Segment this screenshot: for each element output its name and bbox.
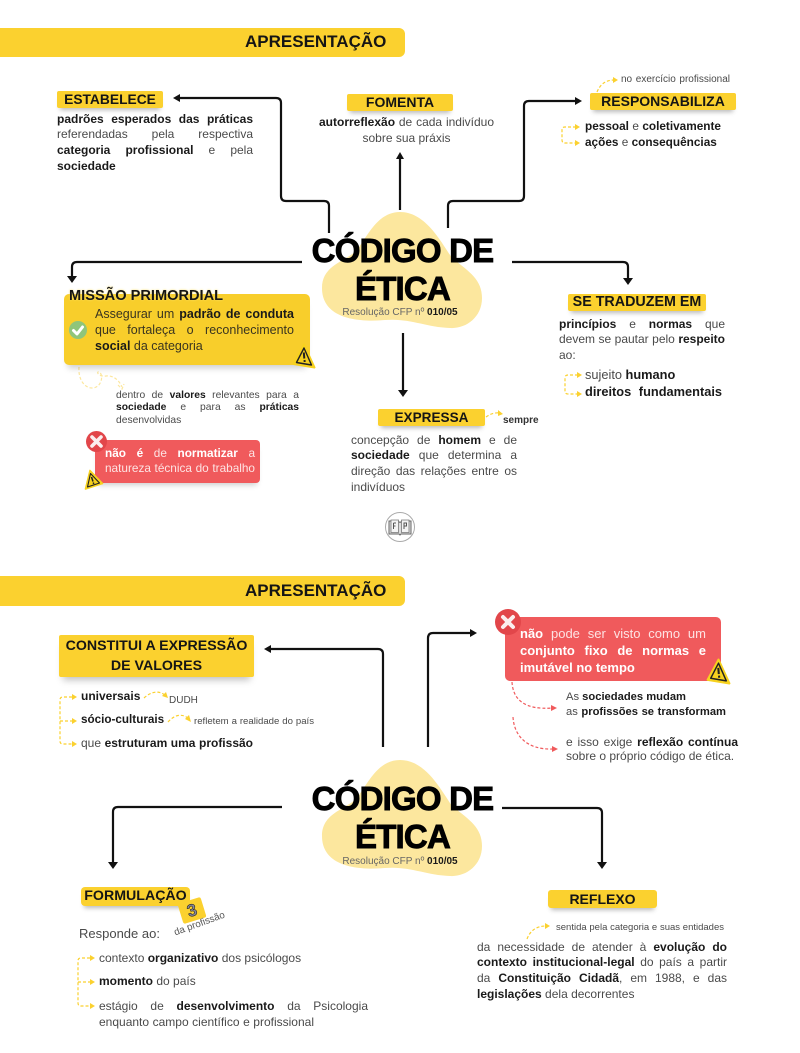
text: não é de normatizar: natureza técnica do trabalho [105, 461, 255, 475]
dashed: responsabiliza list [562, 124, 580, 146]
text: se traduzem em: ao: [559, 348, 576, 362]
text: missão primordial: que fortaleça o reconhecimento [95, 323, 294, 337]
list: formulação: momento do país [99, 974, 196, 988]
icon: warning missão [292, 344, 316, 368]
item: que estruturam uma profissão: que estruturam uma profissão [81, 736, 253, 750]
text: reflexão contínua [566, 734, 738, 763]
list: formulação [99, 950, 368, 1029]
text: estabelece [57, 112, 254, 173]
text: estabelece: referendadas pela respectiva [57, 127, 253, 141]
text: expressa: sociedade que determina a [351, 448, 517, 462]
arrow: to red box [428, 629, 477, 747]
note: sentida pela categoria: sentida pela categoria e suas entidades [556, 922, 724, 932]
text: dentro de valores: sociedade e para as práticas [116, 402, 299, 413]
dashed: formulação list [78, 955, 95, 1009]
list: formulação: enquanto campo científico e profissional [99, 1015, 314, 1029]
text: estabelece: sociedade [57, 159, 116, 173]
logo: book [385, 512, 415, 542]
text: reflexo: contexto institucional-legal do país a partir [477, 955, 727, 969]
text: reflexão contínua: e isso exige reflexão contínua [566, 734, 738, 748]
central blob bottom [322, 760, 482, 876]
arrow: to responsabiliza [448, 97, 582, 228]
banner: apresentação top: APRESENTAÇÃO [245, 32, 386, 51]
banner: apresentação bottom: APRESENTAÇÃO [245, 581, 386, 600]
note: da profissão: da profissão [173, 910, 227, 938]
dashed: universais list [60, 694, 77, 747]
arrow: to expressa [398, 333, 408, 397]
text: fomenta: sobre sua práxis [362, 131, 451, 145]
callout: não pode ser visto [505, 617, 721, 681]
main title bottom: ÉTICA [355, 818, 450, 855]
callout: não é de normatizar [95, 440, 260, 483]
text: missão primordial [95, 307, 294, 353]
banner: apresentação bottom [0, 576, 405, 606]
text: fomenta [319, 115, 494, 145]
list: formulação: contexto organizativo dos psicólogos [99, 950, 301, 964]
subtitle: resolução top: Resolução CFP nº 010/05 [342, 307, 458, 318]
text: não pode ser visto: conjunto fixo de normas e [520, 643, 706, 658]
icon: warning bottom [706, 658, 730, 684]
icon: x bottom [495, 609, 521, 635]
text: reflexo: legislações dela decorrentes [477, 987, 634, 1001]
badge: 3: 3 [185, 900, 199, 921]
text: missão primordial: Assegurar um padrão de conduta [95, 307, 294, 321]
text: dentro de valores [116, 390, 299, 426]
text: expressa: direção das relações entre os [351, 464, 517, 478]
arrow: to constitui [264, 645, 383, 747]
text: dentro de valores: desenvolvidas [116, 415, 181, 426]
panel: missão primordial [64, 294, 310, 365]
icon: x top [86, 431, 107, 452]
text: não pode ser visto [520, 626, 706, 675]
heading: fomenta [347, 94, 453, 111]
badge: 3 [177, 897, 207, 924]
item: universais: universais [81, 688, 140, 702]
main title bottom [312, 780, 494, 855]
text: não pode ser visto: não pode ser visto como um [520, 626, 706, 641]
list: se traduzem em [585, 367, 722, 399]
heading: constitui a expressão de valores: DE VALORES [111, 658, 202, 674]
arrow: to formulação [108, 807, 282, 869]
text: reflexo: da necessidade de atender à evolução do [477, 940, 727, 954]
dashed: no exercício profissional [597, 77, 618, 92]
list: se traduzem em: direitos fundamentais [585, 384, 722, 399]
subtitle: resolução bottom: Resolução CFP nº 010/05 [342, 856, 458, 867]
badge: 3ª da profissão [173, 897, 227, 938]
item: sócio-culturais: sócio-culturais [81, 712, 164, 726]
dashed: sociedades mudam [512, 682, 557, 711]
heading: se traduzem em: SE TRADUZEM EM [573, 294, 701, 310]
text: expressa: indivíduos [351, 480, 405, 494]
dashed: reflexão contínua [513, 717, 558, 752]
text: sociedades mudam: As sociedades mudam [566, 690, 686, 702]
dashed: se traduzem list [565, 372, 582, 397]
note: no exercício profissional: no exercício profissional [621, 74, 730, 85]
central blob top [322, 212, 482, 328]
text: missão primordial: social da categoria [95, 339, 203, 353]
icon: warning callout [84, 470, 104, 490]
main title bottom: CÓDIGO DE [312, 780, 493, 817]
text: não pode ser visto: imutável no tempo [520, 660, 635, 675]
arrow: to reflexo [502, 808, 607, 869]
arrow: to estabelece [173, 94, 329, 233]
text: responsabiliza: ações e consequências [585, 135, 717, 149]
text: reflexo [477, 940, 727, 1001]
heading: reflexo: REFLEXO [569, 891, 636, 907]
main title top [312, 232, 494, 307]
main title top: CÓDIGO DE [312, 232, 493, 269]
text: se traduzem em: princípios e normas que [559, 316, 725, 330]
heading: missão primordial: MISSÃO PRIMORDIAL [69, 288, 223, 304]
dashed: missão curl [79, 367, 124, 389]
arrow: to fomenta [396, 152, 404, 210]
heading: formulação: FORMULAÇÃO [84, 888, 187, 904]
text: responde ao: Responde ao: [79, 926, 160, 940]
dashed: universais to DUDH [144, 692, 168, 698]
banner: apresentação top [0, 28, 405, 57]
heading: responsabiliza: RESPONSABILIZA [601, 93, 725, 109]
text: não é de normatizar [105, 446, 256, 475]
note: sempre: sempre [503, 415, 539, 426]
dashed: sócio-culturais note [168, 715, 191, 722]
text: se traduzem em [559, 316, 725, 362]
heading: expressa: EXPRESSA [394, 410, 469, 425]
text: estabelece: padrões esperados das práticas [57, 112, 253, 126]
text: não é de normatizar: não é de normatizar a [105, 446, 255, 460]
text: fomenta: autorreflexão de cada indivíduo [319, 115, 494, 129]
main title top: ÉTICA [355, 270, 450, 307]
text: sociedades mudam [566, 690, 726, 718]
heading: expressa [378, 409, 485, 426]
text: se traduzem em: devem se pautar pelo respeito [559, 332, 725, 346]
text: dentro de valores: dentro de valores relevantes para a [116, 390, 299, 400]
text: expressa [351, 432, 518, 494]
text: estabelece: categoria profissional e pela [57, 143, 253, 157]
arrow: to missão primordial [67, 262, 302, 283]
text: responsabiliza: pessoal e coletivamente [585, 119, 721, 133]
text: reflexo: da Constituição Cidadã, em 1988, e das [477, 971, 727, 985]
text: responsabiliza [585, 119, 721, 149]
note: refletem a realidade do país: refletem a realidade do país [194, 716, 314, 726]
dashed: sentida [527, 923, 550, 939]
heading: fomenta: FOMENTA [366, 94, 434, 110]
dashed: sempre [486, 410, 503, 417]
heading: constitui a expressão de valores [59, 635, 254, 677]
heading: reflexo [548, 890, 657, 908]
heading: constitui a expressão de valores: CONSTITUI A EXPRESSÃO [66, 638, 247, 654]
list: formulação: estágio de desenvolvimento da Psicologia [99, 999, 368, 1013]
text: reflexão contínua: sobre o próprio código de ética. [566, 749, 734, 763]
list: se traduzem em: sujeito humano [585, 367, 675, 382]
text: expressa: concepção de homem e de [351, 432, 517, 446]
note: DUDH: DUDH [169, 694, 198, 706]
icon: check [69, 321, 87, 339]
text: sociedades mudam: as profissões se transformam [566, 706, 726, 718]
arrow: to se traduzem em [512, 262, 633, 285]
heading: estabelece: ESTABELECE [64, 92, 156, 107]
